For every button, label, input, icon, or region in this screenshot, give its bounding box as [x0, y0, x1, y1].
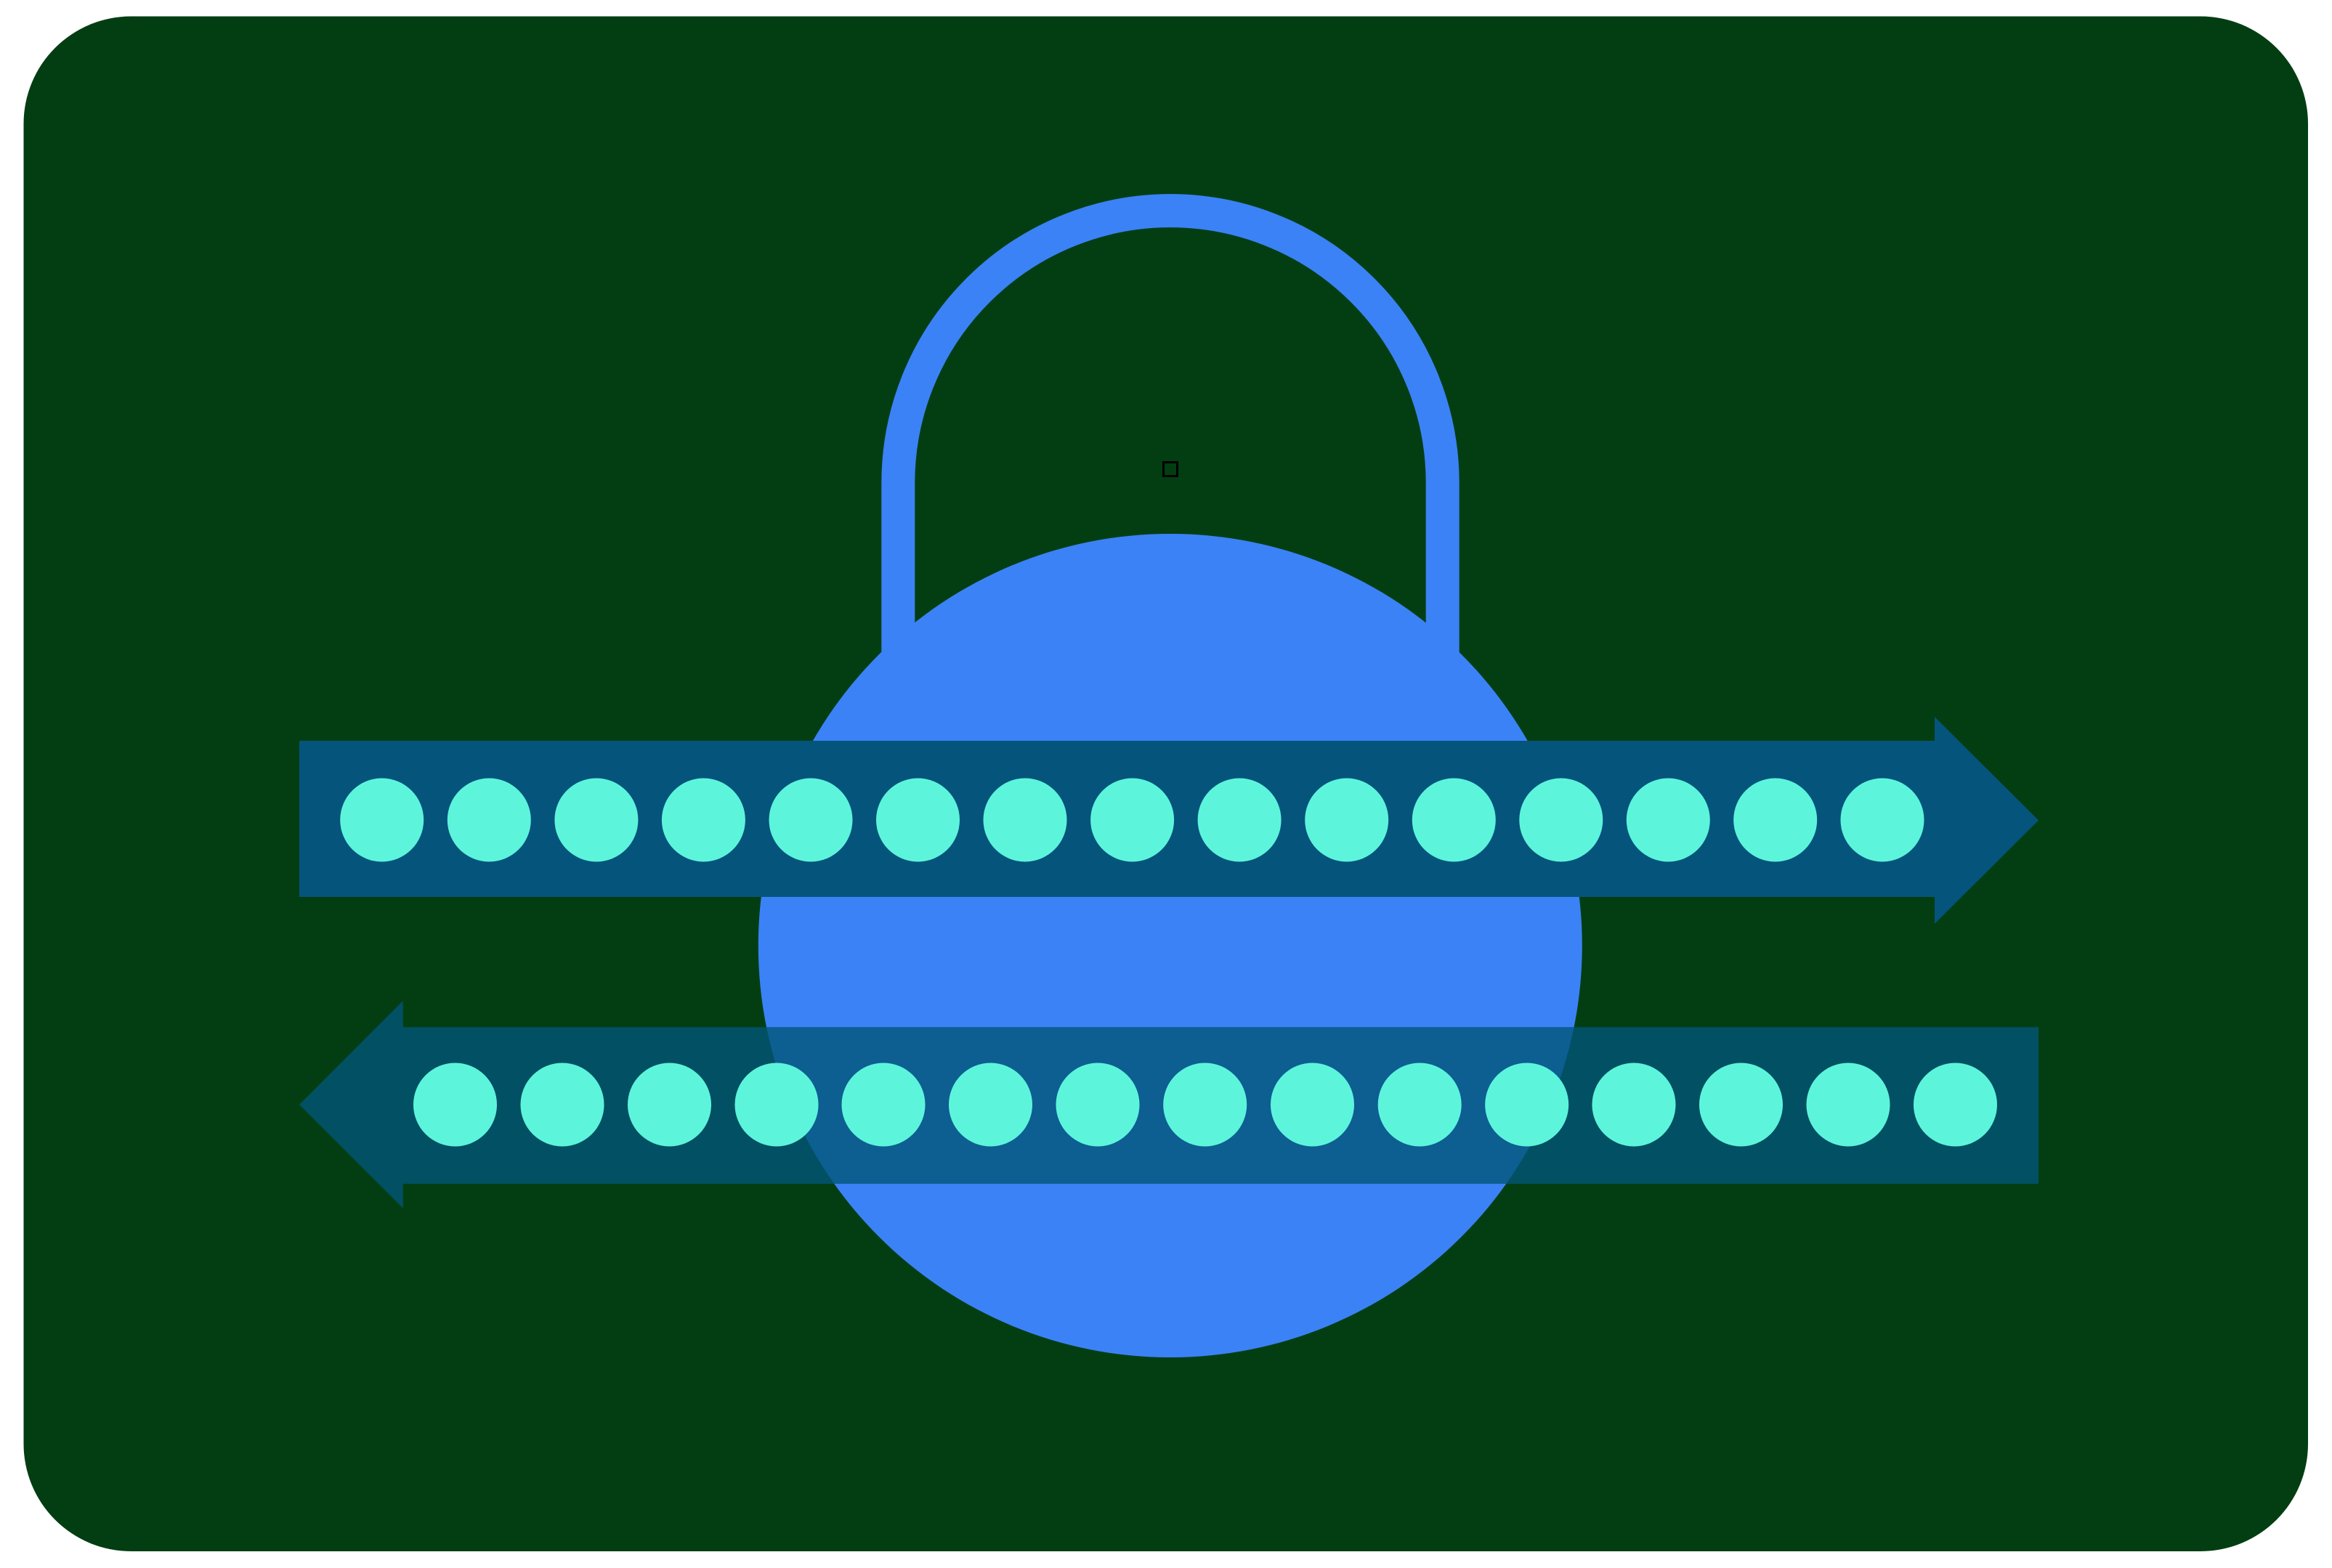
icon: padlock shackle: [898, 211, 1443, 697]
bottom row of data dots: [413, 1063, 1997, 1146]
icon: small keyhole square: [1164, 462, 1177, 476]
bottom arrow pointing left: [299, 1001, 2039, 1209]
top row of data dots: [340, 779, 1924, 861]
arrow: top arrow pointing right: [299, 717, 2039, 924]
icon: padlock body circle: [758, 534, 1582, 1357]
